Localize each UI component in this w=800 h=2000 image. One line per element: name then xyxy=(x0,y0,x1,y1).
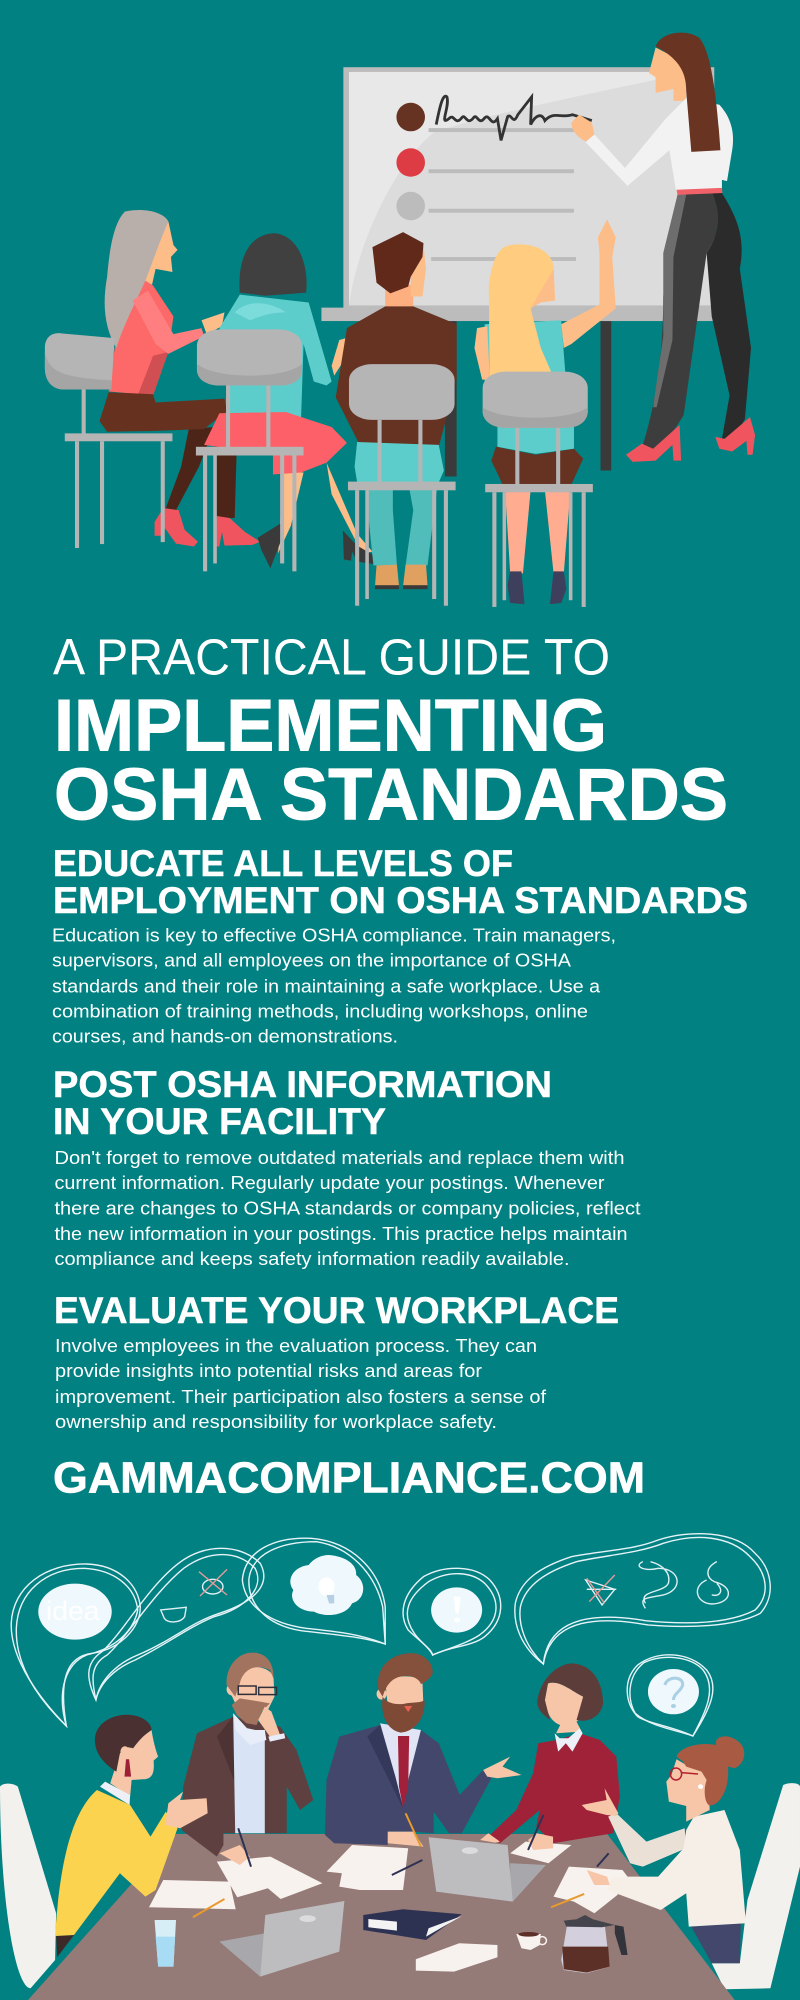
heading: EMPLOYMENT ON OSHA STANDARDS xyxy=(53,880,748,921)
title line: osha standards: OSHA STANDARDS xyxy=(54,754,728,836)
icon: crossed sketches xyxy=(161,1569,227,1622)
icon: idea circle: idea xyxy=(46,1597,100,1626)
body text xyxy=(52,925,616,1047)
title line: a practical guide to: A PRACTICAL GUIDE TO xyxy=(53,628,610,686)
speech bubbles xyxy=(11,1534,770,1736)
seated woman with blonde hair and raised hand xyxy=(474,219,616,604)
coffee carafe xyxy=(561,1915,628,1973)
body text: standards and their role in maintaining a safe workplace. Use a xyxy=(52,976,601,996)
title line: implementing: IMPLEMENTING xyxy=(54,686,607,766)
right chair xyxy=(712,1783,800,1989)
meeting table xyxy=(28,1834,735,2000)
stack of paper xyxy=(416,1943,497,1972)
section: post osha information xyxy=(53,1064,641,1269)
illustration: team meeting around a table xyxy=(0,1534,800,2000)
heading xyxy=(53,1064,552,1142)
glass of water xyxy=(155,1920,176,1967)
hands on the table xyxy=(219,1832,553,1865)
body text: current information. Regularly update your postings. Whenever xyxy=(54,1172,604,1193)
teacher xyxy=(571,33,755,462)
seated woman with grey hair xyxy=(99,210,260,546)
laptop right xyxy=(429,1837,546,1902)
body text: there are changes to OSHA standards or company policies, reflect xyxy=(54,1198,641,1218)
illustration: training session at a whiteboard xyxy=(45,33,755,607)
coffee cup xyxy=(516,1932,546,1950)
heading: IN YOUR FACILITY xyxy=(53,1101,386,1142)
section: educate all levels of employment xyxy=(52,843,748,1047)
papers xyxy=(149,1842,628,1913)
body text: Involve employees in the evaluation process. They can xyxy=(55,1335,537,1356)
body text: compliance and keeps safety information readily available. xyxy=(54,1248,570,1269)
body text: combination of training methods, including workshops, online xyxy=(52,1001,588,1022)
binder xyxy=(363,1909,462,1940)
body text: the new information in your postings. This practice helps maintain xyxy=(54,1223,628,1244)
woman in red sweater xyxy=(488,1663,620,1843)
seated woman with black bob xyxy=(204,233,378,568)
body text xyxy=(55,1335,547,1432)
icon: idea circle xyxy=(38,1584,112,1640)
heading: POST OSHA INFORMATION xyxy=(53,1064,552,1105)
body text xyxy=(54,1147,641,1269)
chair 2 xyxy=(196,329,304,571)
whiteboard xyxy=(321,67,714,476)
chair 4 xyxy=(483,372,593,607)
left chair xyxy=(0,1784,56,1988)
icon: doodles xyxy=(586,1562,728,1608)
man in brown jacket xyxy=(182,1653,313,1857)
website url: GAMMACOMPLIANCE.COM xyxy=(53,1454,645,1502)
heading: EDUCATE ALL LEVELS OF xyxy=(53,843,513,884)
man in navy suit xyxy=(325,1653,521,1845)
section: evaluate your workplace xyxy=(54,1290,619,1432)
icon: exclamation circle xyxy=(431,1587,482,1633)
body text: Education is key to effective OSHA compliance. Train managers, xyxy=(52,925,616,946)
laptop left xyxy=(219,1901,344,1977)
icon: light bulb cloud xyxy=(290,1555,363,1615)
chair 1 xyxy=(45,333,172,548)
chair 3 xyxy=(348,364,456,606)
body text: Don't forget to remove outdated materials and replace them with xyxy=(54,1147,624,1168)
pens and pencils xyxy=(193,1813,609,1917)
seated man xyxy=(336,232,457,589)
body text: improvement. Their participation also fosters a sense of xyxy=(55,1386,547,1407)
body text: provide insights into potential risks and areas for xyxy=(55,1360,482,1381)
title xyxy=(53,628,728,836)
body text: ownership and responsibility for workplace safety. xyxy=(55,1411,497,1432)
body text: courses, and hands-on demonstrations. xyxy=(52,1026,398,1047)
heading xyxy=(53,843,748,921)
icon: question circle xyxy=(648,1669,699,1714)
woman in cream blouse xyxy=(582,1736,746,1963)
woman in yellow sweater xyxy=(55,1715,208,1957)
heading: EVALUATE YOUR WORKPLACE xyxy=(54,1290,619,1331)
body text: supervisors, and all employees on the importance of OSHA xyxy=(52,950,572,971)
